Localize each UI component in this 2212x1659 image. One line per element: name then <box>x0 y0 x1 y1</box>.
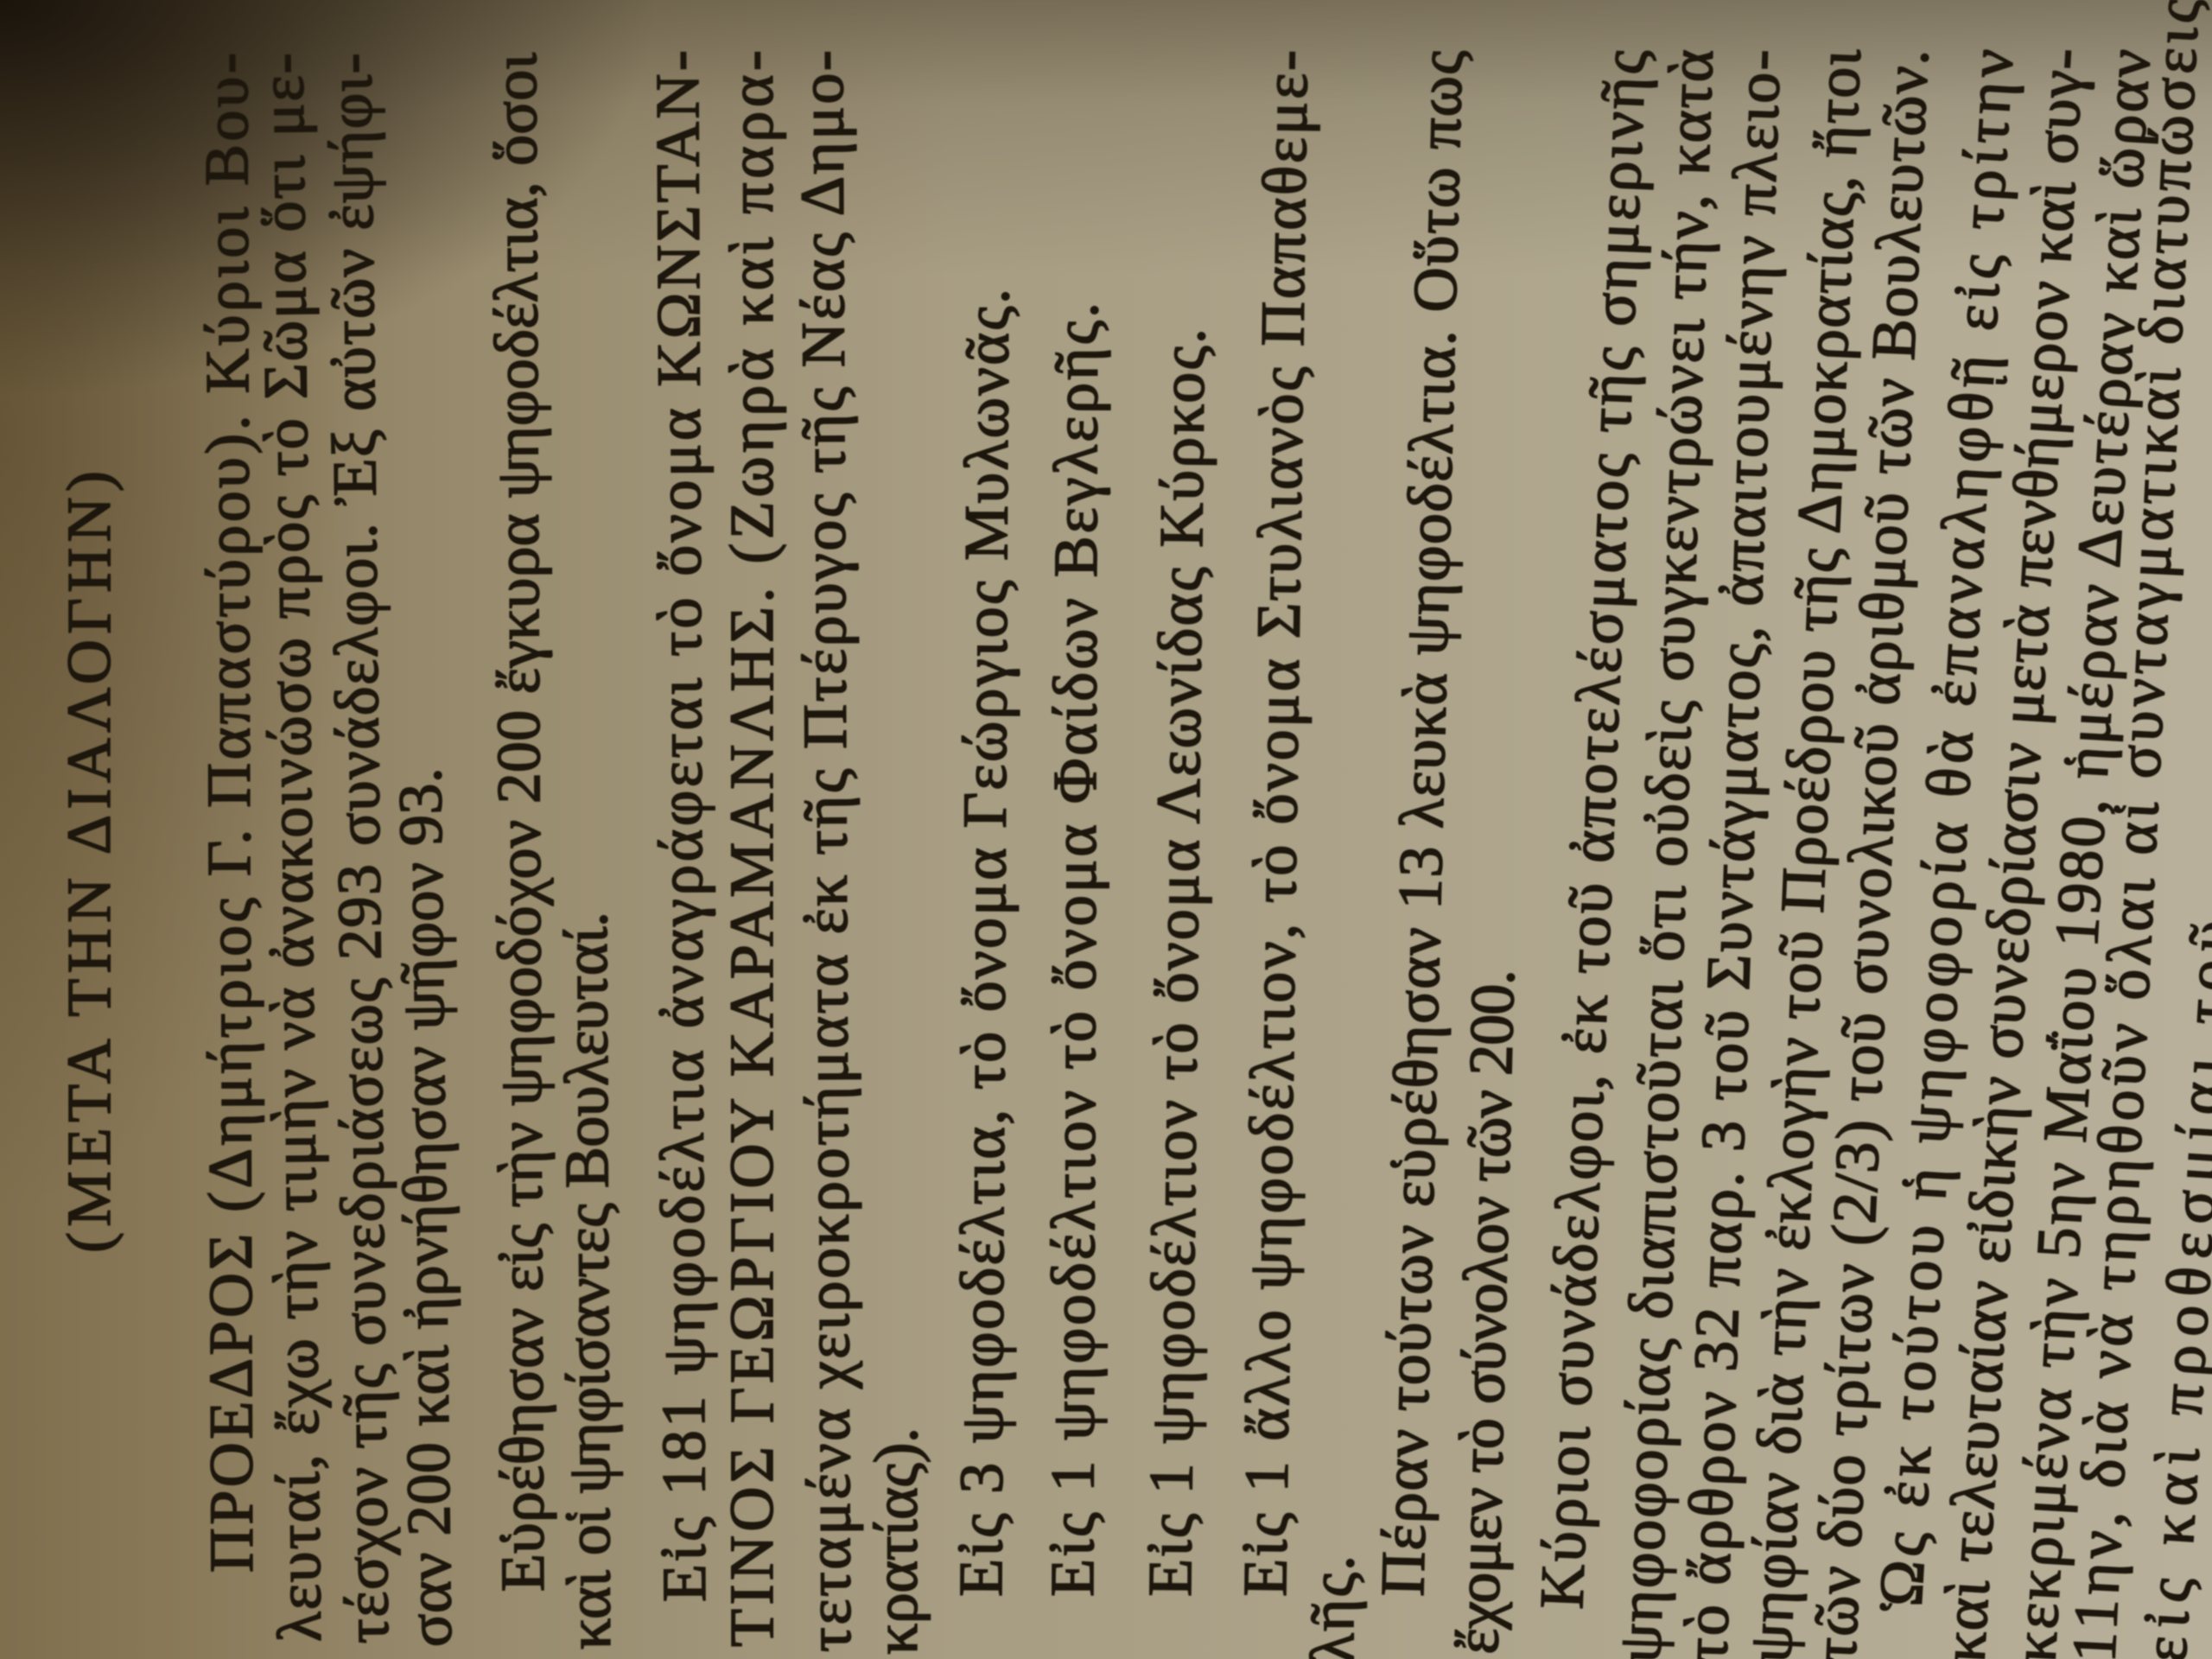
line 16: Πέραν τούτων εὑρέθησαν 13 λευκὰ ψηφοδέλτια. Οὕτω πως <box>1368 49 1476 1597</box>
line 24: καὶ τελευταίαν εἰδικὴν συνεδρίασιν μετὰ πενθήμερον καὶ συγ- <box>1929 47 2097 1659</box>
paragraph: President's announcement <box>192 53 465 1648</box>
line 4: σαν 200 καὶ ἠρνήθησαν ψῆφον 93. <box>385 767 465 1648</box>
line 2: λευταί, ἔχω τὴν τιμὴν νὰ ἀνακοινώσω πρὸς τὸ Σῶμα ὅτι με- <box>247 53 334 1643</box>
line 14: Εἰς 1 ἄλλο ψηφοδέλτιον, τὸ ὄνομα Στυλιανὸς Παπαθεμε- <box>1230 49 1321 1597</box>
ballot count: Kyrkos: Εἰς 1 ψηφοδέλτιον τὸ ὄνομα Λεωνίδας Κύρκος. <box>1135 327 1218 1597</box>
line 6: καὶ οἱ ψηφίσαντες Βουλευταί. <box>551 912 624 1649</box>
line 8: ΤΙΝΟΣ ΓΕΩΡΓΙΟΥ ΚΑΡΑΜΑΝΛΗΣ. (Ζωηρὰ καὶ παρα- <box>717 50 786 1647</box>
line 20: τὸ ἄρθρον 32 παρ. 3 τοῦ Συντάγματος, ἀπαιτουμένην πλειο- <box>1671 48 1794 1659</box>
line 18: Κύριοι συνάδελφοι, ἐκ τοῦ ἀποτελέσματος τῆς σημερινῆς <box>1527 48 1659 1611</box>
paragraph: 181 ballots result <box>643 50 931 1655</box>
line 26: 11ην, διὰ νὰ τηρηθοῦν ὅλαι αἱ συνταγματικαὶ διατυπώσεις <box>2059 0 2212 1659</box>
paragraph: outcome of the vote <box>1527 47 1942 1659</box>
line 23: Ὡς ἐκ τούτου ἡ ψηφοφορία θὰ ἐπαναληφθῇ εἰς τρίτην <box>1866 47 2026 1613</box>
line 3: τέσχον τῆς συνεδριάσεως 293 συνάδελφοι. Ἐξ αὐτῶν ἐψήφι- <box>315 53 402 1644</box>
line 22: τῶν δύο τρίτων (2/3) τοῦ συνολικοῦ ἀριθμοῦ τῶν Βουλευτῶν. <box>1800 48 1942 1659</box>
title: (ΜΕΤΑ ΤΗΝ ΔΙΑΛΟΓΗΝ) <box>54 471 124 1253</box>
ballot count: Papathemelis <box>1230 49 1367 1659</box>
line 25: κεκριμένα τὴν 5ην Μαΐου 1980, ἡμέραν Δευτέραν καὶ ὥραν <box>1999 47 2164 1659</box>
line 9: τεταμένα χειροκροτήματα ἐκ τῆς Πτέρυγος τῆς Νέας Δημο- <box>787 50 864 1652</box>
line 17: ἔχομεν τὸ σύνολον τῶν 200. <box>1442 969 1528 1655</box>
line 1: ΠΡΟΕΔΡΟΣ (Δημήτριος Γ. Παπαστύρου). Κύριοι Βου- <box>192 53 266 1573</box>
line 7: Εἰς 181 ψηφοδέλτια ἀναγράφεται τὸ ὄνομα ΚΩΝΣΤΑΝ- <box>643 50 719 1602</box>
line 5: Εὑρέθησαν εἰς τὴν ψηφοδόχον 200 ἔγκυρα ψηφοδέλτια, ὅσοι <box>480 52 557 1592</box>
line 21: ψηφίαν διὰ τὴν ἐκλογὴν τοῦ Προέδρου τῆς Δημοκρατίας, ἤτοι <box>1735 47 1874 1659</box>
paragraph: valid ballots <box>480 52 624 1649</box>
paragraph: blank ballots <box>1368 49 1528 1655</box>
ballot count: Veglers: Εἰς 1 ψηφοδέλτιον τὸ ὄνομα Φαίδων Βεγλερῆς. <box>1038 302 1111 1597</box>
paragraph: repeat vote announcement <box>1866 0 2212 1659</box>
line 19: ψηφοφορίας διαπιστοῦται ὅτι οὐδεὶς συγκεντρώνει τήν, κατὰ <box>1605 48 1726 1659</box>
ballot count: Mylonas: Εἰς 3 ψηφοδέλτια, τὸ ὄνομα Γεώργιος Μυλωνᾶς. <box>946 289 1022 1597</box>
line 10: κρατίας). <box>861 1427 931 1655</box>
